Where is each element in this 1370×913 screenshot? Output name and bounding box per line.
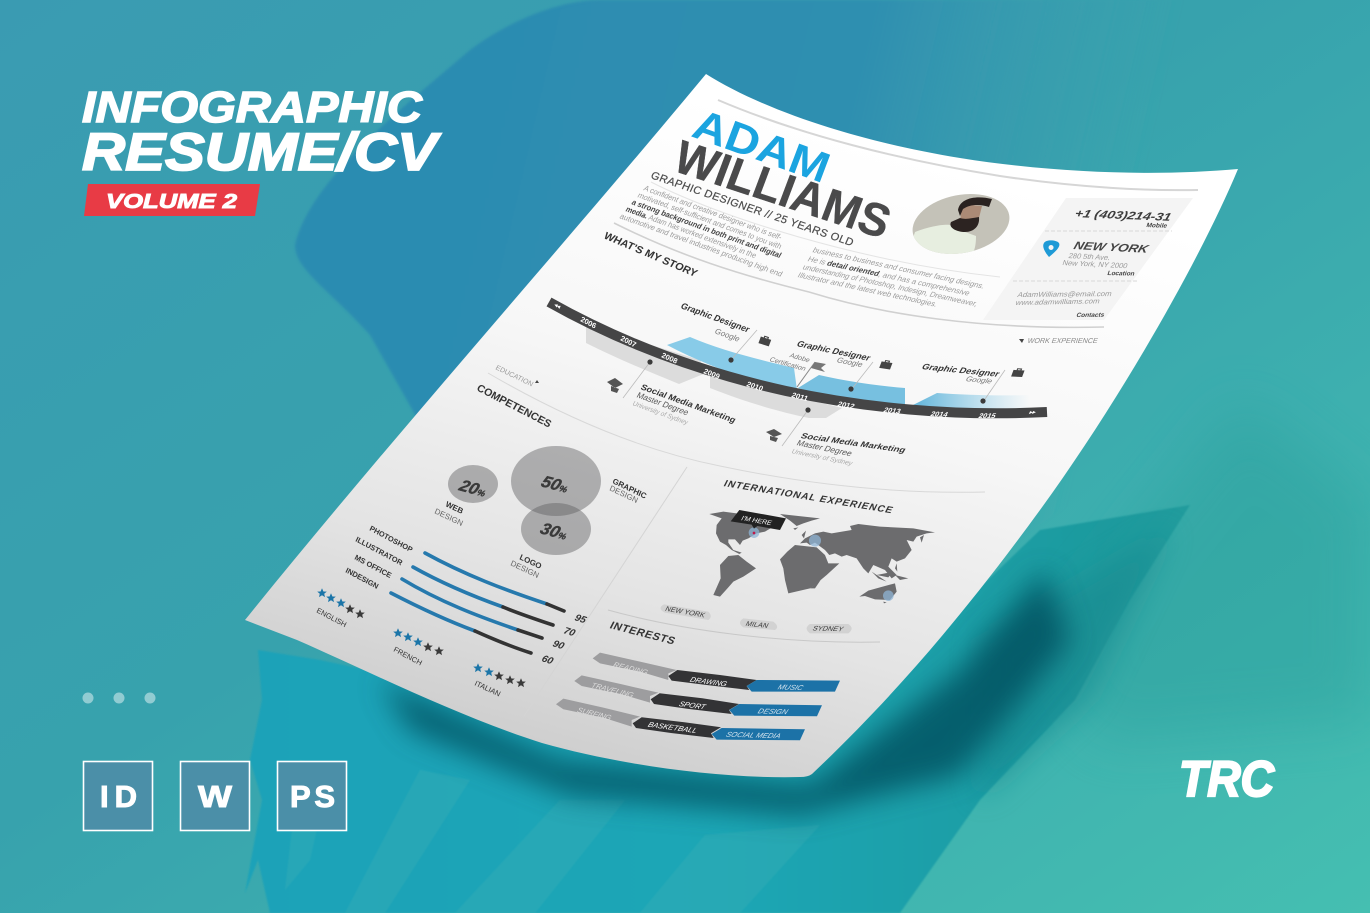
certification with flag: Adobe	[788, 353, 811, 364]
name: WILLIAMS	[667, 131, 898, 248]
chart: bubbles: DESIGN	[509, 559, 541, 580]
email and web: AdamWilliams@email.com	[1016, 289, 1113, 299]
education bands	[586, 325, 842, 418]
chart: language stars: ITALIAN	[473, 679, 502, 698]
chart: language stars: ENGLISH	[315, 606, 348, 629]
chart: language stars: FRENCH	[392, 645, 424, 667]
chart: bubbles: GRAPHIC	[611, 477, 648, 501]
job 3	[920, 362, 1002, 385]
about paragraph right: business to business and consumer facing designs.	[811, 246, 986, 290]
job 1: Graphic Designer	[679, 301, 752, 334]
section title: interests: INTERESTS	[608, 620, 677, 647]
timeline band	[549, 302, 1047, 413]
year labels: 2015	[977, 412, 997, 420]
about paragraph left	[618, 184, 784, 279]
chart: skill bars: 70	[562, 626, 577, 639]
email and web: www.adamwilliams.com	[1013, 297, 1101, 307]
chart: interest ribbons	[556, 653, 840, 740]
chart: interest ribbons: SPORT	[678, 700, 708, 711]
row 3	[556, 699, 805, 740]
chart: world map	[709, 510, 935, 603]
chart: interest ribbons: DESIGN	[757, 707, 790, 716]
software icons: PS	[290, 779, 335, 814]
badge: volume 2: VOLUME 2	[106, 191, 237, 213]
chart: skill bars	[344, 524, 588, 667]
about paragraph right: Illustrator and the latest web technologies.	[796, 271, 939, 309]
chart: bubbles: 20%	[455, 476, 490, 500]
row 1	[593, 653, 840, 692]
education entry 2	[766, 429, 908, 467]
chart: bubbles: DESIGN	[433, 507, 465, 528]
year labels: ◂◂	[552, 302, 562, 311]
certification with flag: Certification	[768, 357, 807, 373]
row 2	[574, 675, 822, 716]
heading	[82, 83, 442, 182]
about paragraph left: media. Adam has worked extensively in the	[624, 205, 759, 260]
about paragraph right	[796, 246, 986, 309]
chart: bubbles: 30%	[537, 519, 571, 543]
chart: interest ribbons: READING	[612, 660, 649, 677]
chart: language stars	[315, 588, 526, 698]
chart: interest ribbons: BASKETBALL	[647, 720, 699, 735]
education entry 2: Master Degree	[795, 438, 855, 458]
city: NEW YORK	[1072, 240, 1150, 256]
software icons: W	[198, 779, 233, 814]
city pills: MILAN	[744, 619, 770, 630]
chart: timeline	[494, 301, 1047, 467]
year labels: 2007	[619, 334, 638, 349]
name: ADAM	[686, 101, 836, 193]
education entry 1: Master Degree	[635, 390, 691, 417]
address: 280 5th Ave.	[1067, 251, 1112, 262]
email and web	[1013, 289, 1113, 307]
job 1: Google	[713, 327, 742, 344]
callout: I'm here	[731, 510, 786, 530]
about paragraph right: understanding of Photoshop, Indesign, Dreamweaver,	[801, 263, 979, 308]
callout: I'm here: I'M HERE	[740, 516, 773, 527]
software icons: ID	[100, 779, 137, 814]
year labels: 2011	[790, 391, 810, 403]
slider dots	[82, 692, 156, 704]
chart: interest ribbons: MUSIC	[777, 683, 805, 692]
icon: location pin	[1043, 240, 1059, 257]
phone: +1 (403)214-31	[1073, 208, 1173, 224]
chart: bubbles	[433, 446, 648, 580]
chart: bubbles: LOGO	[518, 553, 543, 571]
portrait photo	[912, 194, 1010, 254]
about paragraph left: a strong background in both print and digital	[630, 198, 783, 260]
year labels: 2006	[579, 315, 598, 330]
job title: GRAPHIC DESIGNER // 25 YEARS OLD	[649, 170, 855, 249]
job 2: Graphic Designer	[795, 339, 873, 363]
chart: skill bars: 60	[540, 654, 555, 667]
chart: skill bars: MS OFFICE	[353, 553, 393, 580]
year labels: 2009	[702, 367, 721, 381]
panel: resume sheet	[245, 74, 1238, 777]
job 3: Google	[964, 375, 995, 385]
section title: international experience: INTERNATIONAL EXPERIENCE	[722, 479, 895, 516]
chart: interest ribbons: SURFING	[576, 706, 613, 722]
about paragraph right: He is detail oriented, and has a comprehensive	[806, 255, 972, 297]
chart: bubbles: DESIGN	[608, 484, 640, 505]
section rule	[614, 223, 1104, 327]
top rule	[718, 100, 1198, 190]
chart: skill bars: 95	[573, 613, 588, 626]
label: education: EDUCATION	[494, 365, 534, 388]
city pills: NEW YORK	[664, 604, 707, 619]
heading: INFOGRAPHIC	[82, 83, 423, 132]
year labels: 2012	[836, 400, 856, 411]
section title: competences: COMPETENCES	[475, 382, 553, 430]
paper shadow	[380, 570, 1070, 815]
about paragraph left: A confident and creative designer who is self-	[642, 184, 784, 242]
icons: briefcase	[758, 335, 1025, 377]
address: New York, NY 2000	[1061, 258, 1129, 270]
markers and connectors	[623, 330, 1005, 446]
city pills: SYDNEY	[811, 624, 845, 633]
map markers	[749, 527, 894, 601]
year labels: ▸▸	[1027, 410, 1038, 416]
about paragraph left: automotive and travel industries producing high end	[618, 212, 784, 279]
section title: what's my story: WHAT'S MY STORY	[602, 230, 699, 280]
education entry 2: University of Sydney	[790, 449, 854, 467]
year labels: 2008	[660, 351, 679, 366]
job 3: Graphic Designer	[920, 362, 1002, 378]
job 2: Google	[835, 356, 865, 369]
chart: skill bars: 90	[551, 639, 566, 652]
chart: skill bars: INDESIGN	[344, 566, 380, 591]
certification with flag	[768, 353, 826, 387]
contacts label: Contacts	[1075, 312, 1106, 319]
chart: skill bars: PHOTOSHOP	[368, 524, 414, 554]
location label: Location	[1106, 270, 1136, 277]
education entry 1: University of Sydney	[631, 401, 689, 427]
work bands	[667, 337, 1030, 414]
phone label: Mobile	[1145, 222, 1168, 230]
year labels: 2010	[745, 380, 765, 393]
education entry 1: Social Media Marketing	[639, 382, 738, 425]
year labels: 2014	[929, 410, 950, 419]
chart: bubbles: WEB	[444, 500, 465, 516]
heading: RESUME/CV	[82, 123, 442, 182]
badge: volume 2	[84, 184, 260, 216]
education entry 1	[607, 378, 738, 427]
about paragraph left: motivated, self-sufficient and comes to you with	[636, 191, 783, 251]
year labels	[552, 302, 1038, 420]
panel: contact details	[983, 198, 1193, 320]
software icons	[84, 762, 346, 830]
chart: interest ribbons: TRAVELING	[590, 681, 635, 699]
chart: interest ribbons: DRAWING	[689, 675, 729, 688]
education entry 2: Social Media Marketing	[799, 431, 908, 454]
address	[1061, 251, 1129, 270]
city pills	[661, 604, 852, 633]
label: work experience: WORK EXPERIENCE	[1026, 336, 1099, 345]
chart: skill bars: ILLUSTRATOR	[354, 535, 405, 568]
chart: bubbles: 50%	[538, 472, 572, 496]
logo: TRC: TRC	[1179, 751, 1275, 807]
year labels: 2013	[882, 406, 902, 415]
chart: interest ribbons: SOCIAL MEDIA	[725, 730, 782, 740]
